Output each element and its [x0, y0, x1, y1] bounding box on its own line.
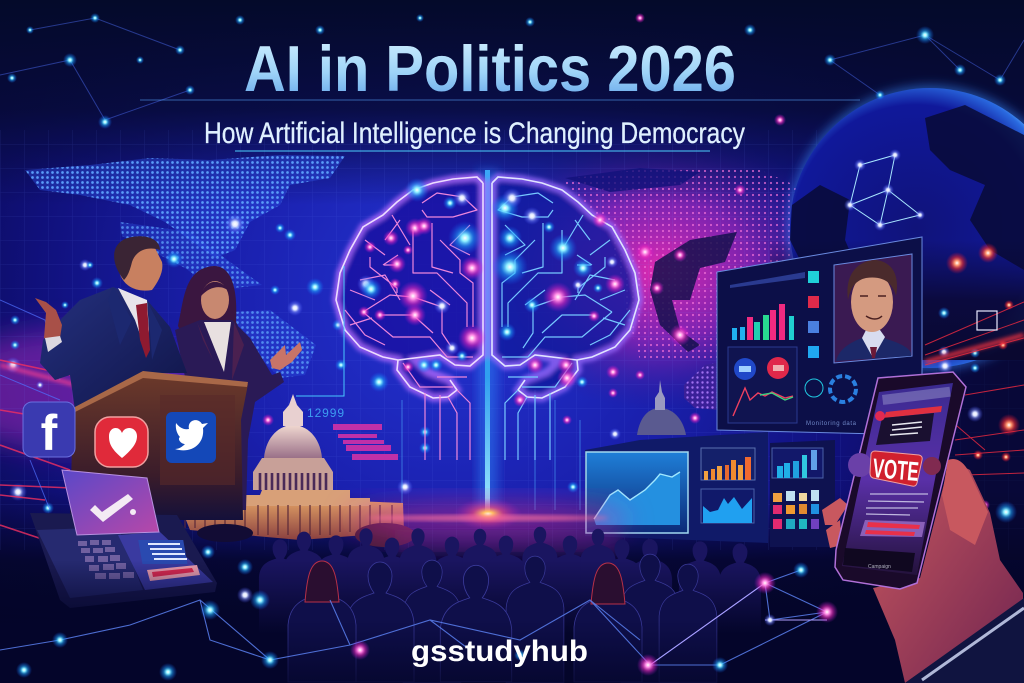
thumb over phone edge: [942, 459, 988, 545]
crowd: front row: [288, 554, 717, 683]
jacket sleeve: [905, 598, 1024, 683]
woman presenter: [175, 266, 302, 510]
upper dashboard panel: Monitoring data: [806, 421, 857, 427]
portrait of candidate: [834, 254, 912, 363]
title block: [140, 32, 860, 151]
upper dashboard panel: [717, 237, 922, 435]
starfield of glowing nodes: [0, 13, 1024, 523]
icon: facebook: f: [41, 405, 58, 461]
data readout and magenta bars: 12999: [307, 406, 344, 420]
gsstudyhub label: gsstudyhub: [411, 635, 588, 668]
world map: Asia, magenta with dark coast: [560, 168, 830, 410]
vertical data beam: [402, 170, 580, 515]
man presenter: [35, 236, 187, 410]
line chart: [586, 452, 688, 533]
data readout and magenta bars: [296, 266, 398, 460]
icon: heart: [95, 417, 148, 467]
keypad: [78, 540, 134, 579]
chart panel with line graph: [728, 347, 797, 423]
hand holding phone: [822, 460, 1024, 683]
globe with network constellation: [770, 85, 1024, 371]
VOTE badge: [870, 451, 922, 487]
horizon glow: [348, 498, 628, 556]
capitol building: [177, 394, 415, 547]
network of connected voters: [0, 545, 838, 681]
VOTE badge: VOTE: [871, 453, 920, 487]
blue area chart: [701, 489, 754, 523]
teal bar chart: [772, 448, 823, 478]
smartphone: [835, 372, 966, 589]
crowd fade: [0, 560, 1024, 683]
icon grid: [773, 490, 819, 529]
crowd bottom fade: [0, 620, 1024, 683]
world map: Americas, dotted blue: [25, 155, 345, 378]
subtitle: How Artificial Intelligence is Changing Democracy: [204, 117, 745, 150]
podium: [70, 371, 248, 520]
small dome: [637, 380, 686, 435]
crowd: back row: [259, 527, 761, 663]
icon: twitter: [166, 412, 216, 463]
bar chart: [732, 304, 794, 340]
left streak lines: [0, 300, 120, 545]
lower dashboard panels: [585, 432, 835, 547]
icon: facebook: [23, 402, 75, 461]
title: AI in Politics 2026: [244, 32, 736, 105]
orange bar chart: [701, 448, 755, 480]
right streak lines: [925, 302, 1024, 475]
smartphone: Campaign: [868, 564, 891, 570]
brain: circuit hemispheres: [336, 177, 639, 460]
voting machine: [30, 470, 217, 608]
